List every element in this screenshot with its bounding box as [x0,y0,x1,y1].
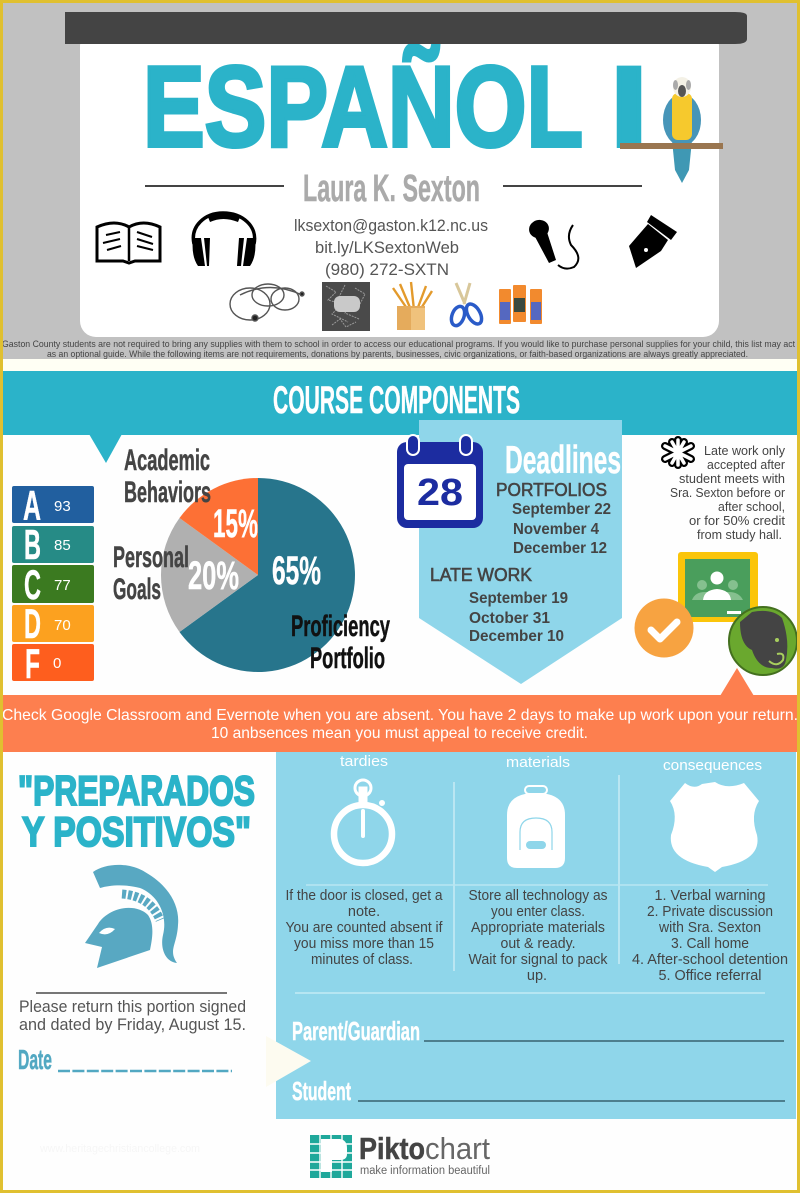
icon: microphone [527,218,578,269]
absence notice banner: Check Google Classroom and Evernote when you are absent. You have 2 days to make up work upon your return. [2,707,798,724]
column: materials: materials [506,754,570,771]
column: consequences: 1. Verbal warning [654,888,766,904]
icon: spartan helmet [85,865,178,968]
icon: asterisk [665,440,691,465]
date field: Date [18,1044,52,1075]
absence notice banner [2,695,798,752]
deadlines dates: December 12 [513,540,607,557]
grade C [12,561,94,608]
icon: pencil cup [393,282,432,330]
icon: evernote [729,607,797,675]
slice labels: Academic [124,444,210,477]
icon: earbuds [230,284,304,321]
piktochart logo: chart [425,1131,490,1166]
grade scale [12,482,94,687]
deadlines heading: Deadlines [505,439,621,482]
column: tardies: tardies [340,753,388,770]
grade B: B [24,521,41,568]
icon: scissors [449,283,485,327]
icon: headphones [193,212,255,266]
teacher name: Laura K. Sexton [303,168,480,210]
slice labels [113,444,390,675]
icon: calendar [397,435,483,528]
column: materials: up. [527,968,547,984]
deadlines dates: September 19 [469,590,568,607]
signature lines: Parent/Guardian [292,1016,420,1046]
signature lines [292,1016,785,1106]
grade F: 0 [53,655,61,672]
slice labels: Personal [113,541,189,574]
grade F: F [25,640,40,687]
late work note: from study hall. [697,527,782,542]
icon: stopwatch [334,780,392,863]
slice values [188,502,321,598]
return slip note: and dated by Friday, August 15. [19,1015,246,1034]
column: tardies: you miss more than 15 [294,936,434,952]
grade A: A [23,482,41,529]
contact details [294,216,488,279]
grade C: 77 [54,577,71,594]
column: materials: Appropriate materials [471,920,605,936]
column: tardies: minutes of class. [311,952,413,968]
slice values: 15% [213,502,258,546]
grade D: D [24,600,41,647]
slice labels: Goals [113,573,161,606]
column: materials: Store all technology as [468,888,608,904]
contact details: lksexton@gaston.k12.nc.us [294,216,488,235]
column: consequences [632,757,788,984]
slice values: 20% [188,554,239,598]
grade A: 93 [54,498,71,515]
motto: "PREPARADOS [18,767,255,814]
late work note [670,443,786,542]
deadlines dates [430,480,611,645]
late work note: after school, [718,499,785,514]
supplies photos [230,282,542,331]
deadlines dates: November 4 [513,521,599,538]
icon: parrot [620,77,723,183]
column: materials: you enter class. [491,904,585,920]
icon: book [97,223,160,263]
column: consequences: 5. Office referral [658,968,762,984]
icon: google classroom [678,552,758,622]
column: consequences: 2. Private discussion [647,904,773,920]
column: tardies: You are counted absent if [286,920,443,936]
icon: pen nib [629,215,677,268]
motto [18,767,255,855]
disclaimer: as an optional guide. While the following items are not requirements, donations by parents, businesses, civic organizations, or faith-based organizations are always greatly appreciated. [47,349,748,360]
logo mark [310,1135,352,1178]
absence notice banner: 10 anbsences mean you must appeal to receive credit. [211,725,588,742]
pie chart [113,444,390,675]
column: tardies: note. [348,904,380,920]
slice labels: Proficiency [291,610,390,643]
late work note: student meets with [679,471,785,486]
grade A [12,482,94,529]
deadlines dates: October 31 [469,610,550,627]
late work note: or for 50% credit [689,513,785,528]
piktochart logo [310,1131,490,1178]
slice labels: Behaviors [124,476,211,509]
contact details: (980) 272-SXTN [325,260,449,279]
rules panel [266,752,796,1119]
motto: Y POSITIVOS" [22,808,251,855]
signature lines: Student [292,1076,351,1106]
title: ESPAÑOL [143,44,583,171]
header panel [0,0,800,371]
column: materials [468,754,608,984]
icon: glue sticks [499,285,542,324]
grade B: 85 [54,537,71,554]
grade D [12,600,94,647]
slice values: 65% [272,549,321,593]
grade B [12,521,94,568]
deadlines dates: September 22 [512,501,611,518]
section banner: course components [3,371,797,463]
column: tardies [286,753,443,968]
column: consequences: with Sra. Sexton [658,920,761,936]
slice labels: Portfolio [310,642,385,675]
column: materials: Wait for signal to pack [468,952,608,968]
watermark: www.heritagechristiancollege.com [39,1143,200,1155]
piktochart logo: Pikto [359,1131,425,1166]
roller bar [65,12,747,44]
pointer triangle [720,668,754,696]
deadlines dates: December 10 [469,628,564,645]
icon: calendar: 28 [417,472,463,514]
piktochart logo: make information beautiful [360,1165,490,1177]
deadlines dates: LATE WORK [430,565,532,585]
grade F [12,640,94,687]
column: tardies: If the door is closed, get a [286,888,443,904]
late work note: accepted after [707,457,786,472]
icon: orange check badge [634,598,694,658]
grade D: 70 [54,617,71,634]
section banner: course components: COURSE COMPONENTS [273,379,520,422]
return slip note [19,992,246,1034]
contact details: bit.ly/LKSextonWeb [315,238,459,257]
return slip note: Please return this portion signed [19,997,246,1016]
grade C: C [24,561,41,608]
column: consequences: consequences [663,757,762,774]
icon: composition notebook [322,282,370,331]
title: I [610,44,648,171]
column: consequences: 4. After-school detention [632,952,788,968]
column: consequences: 3. Call home [671,936,749,952]
column: materials: out & ready. [500,936,576,952]
deadlines arrow panel [397,420,622,684]
late work note: Sra. Sexton before or [670,485,786,500]
disclaimer [2,339,795,360]
icon: shield [670,782,759,872]
deadlines dates: PORTFOLIOS [496,480,607,500]
late work note: Late work only [704,443,785,458]
icon: backpack [507,786,565,868]
